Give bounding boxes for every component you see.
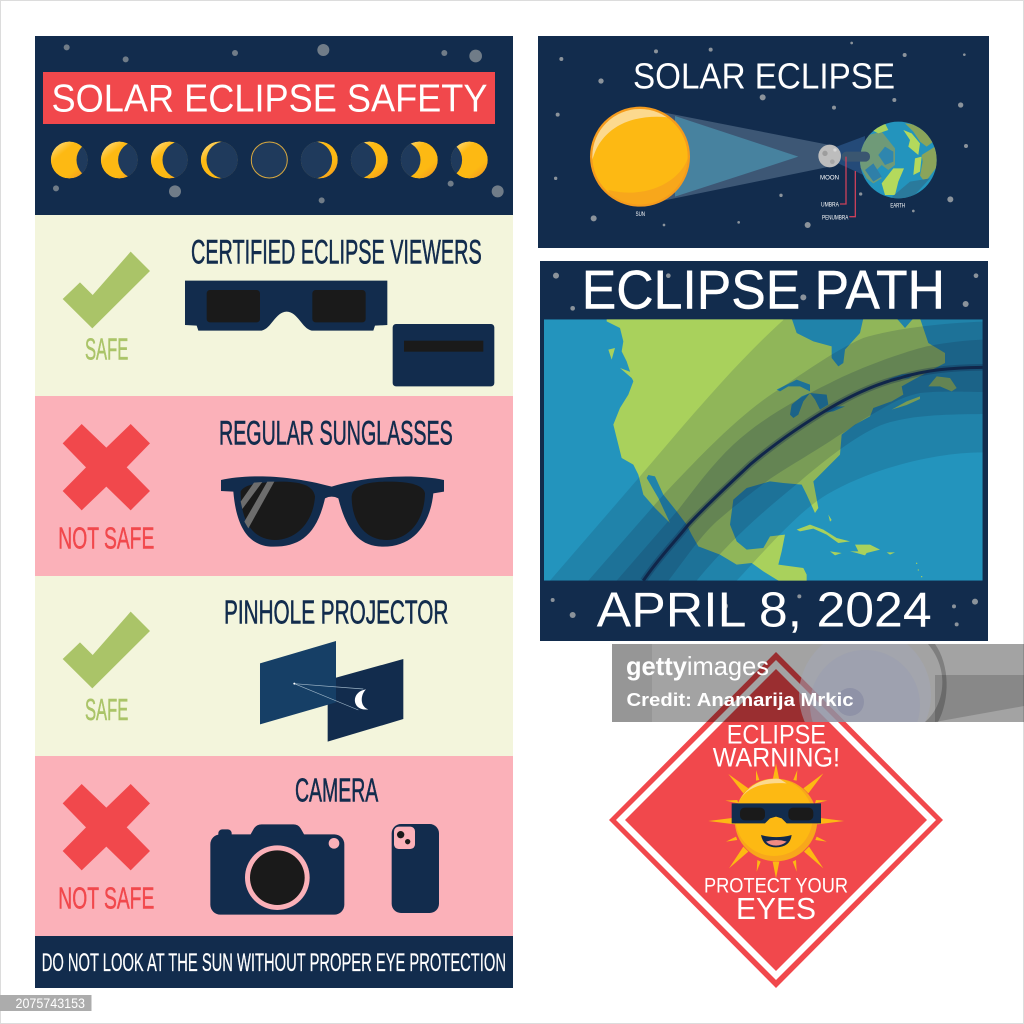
great lakes <box>777 372 918 418</box>
icon: viewer card <box>393 324 494 386</box>
sign text top: WARNING! <box>713 743 840 773</box>
path of totality bands <box>550 320 982 580</box>
icon: pinhole cards <box>260 641 403 742</box>
icon: eclipse glasses <box>185 281 387 331</box>
panel: eclipse warning sign <box>609 652 943 988</box>
diagram labels: PENUMBRA <box>822 214 849 221</box>
sign text top <box>713 719 840 773</box>
heading: ECLIPSE PATH <box>582 258 945 320</box>
row: camera <box>35 756 513 936</box>
image id: 2075743153 <box>16 995 85 1011</box>
footer warning: DO NOT LOOK AT THE SUN WITHOUT PROPER EYE PROTECTION <box>42 950 506 977</box>
watermark logo: gettyimages <box>626 651 769 681</box>
watermark band <box>612 644 1024 722</box>
heading: REGULAR SUNGLASSES <box>219 414 453 452</box>
diagram labels: SUN <box>636 211 645 218</box>
row: pinhole projector <box>35 576 513 756</box>
diagram labels: EARTH <box>890 202 905 209</box>
sign text top: ECLIPSE <box>727 719 826 749</box>
panel: solar eclipse safety <box>35 36 513 988</box>
icon: check <box>63 252 150 328</box>
icon: cross <box>63 784 150 870</box>
eclipse phases row <box>51 142 488 178</box>
watermark credit: Credit: Anamarija Mrkic <box>626 689 854 710</box>
caribbean islands <box>797 515 922 577</box>
date: APRIL 8, 2024 <box>597 584 932 638</box>
footer warning <box>35 936 513 988</box>
safe label: SAFE <box>85 693 128 727</box>
icon: phone <box>392 824 439 913</box>
not safe label: NOT SAFE <box>58 521 154 555</box>
heading: CERTIFIED ECLIPSE VIEWERS <box>191 233 482 271</box>
row: regular sunglasses <box>35 396 513 576</box>
icon: sunglasses <box>221 476 444 547</box>
earth <box>837 122 938 200</box>
panel: eclipse path <box>540 258 988 641</box>
diagram labels: MOON <box>820 174 839 181</box>
icon: sun <box>590 106 690 207</box>
heading: CAMERA <box>295 772 378 809</box>
icon: camera <box>210 824 344 915</box>
diagram labels <box>636 174 905 221</box>
sign text bottom: PROTECT YOUR <box>704 875 848 898</box>
row: certified eclipse viewers <box>35 215 513 396</box>
icon: check <box>63 612 150 688</box>
icon: cross <box>63 424 150 510</box>
diagram labels: UMBRA <box>821 202 839 209</box>
safe label: SAFE <box>85 332 128 366</box>
not safe label: NOT SAFE <box>58 881 154 915</box>
icon: sun with glasses <box>708 763 844 878</box>
map of north america <box>544 319 983 581</box>
heading: PINHOLE PROJECTOR <box>224 593 448 630</box>
header band <box>35 36 513 215</box>
panel: solar eclipse diagram <box>538 36 989 248</box>
light beams <box>663 112 830 201</box>
sign text bottom: EYES <box>736 892 816 926</box>
label leader lines <box>840 157 855 217</box>
heading: SOLAR ECLIPSE <box>633 55 895 96</box>
sign text bottom <box>704 875 848 926</box>
title banner: SOLAR ECLIPSE SAFETY <box>52 78 488 121</box>
icon: moon <box>818 145 841 167</box>
